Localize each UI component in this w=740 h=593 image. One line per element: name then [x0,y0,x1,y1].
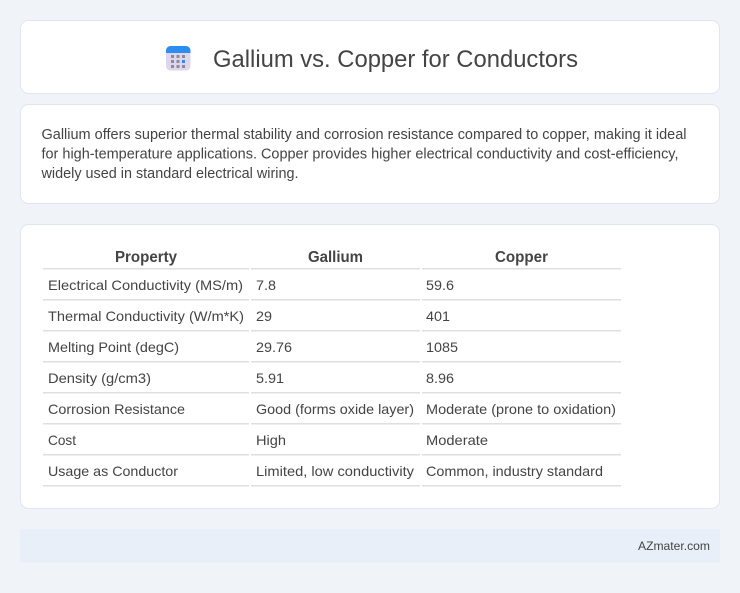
row: usage as conductor: Limited, low conductivity [256,463,414,479]
panel: comparison table [20,224,720,508]
row: electrical conductivity: 7.8 [256,277,276,293]
table header [115,249,548,266]
row: thermal conductivity [48,308,450,324]
table header: Property [115,249,177,266]
row: cost: Moderate [426,432,488,448]
row: thermal conductivity: 401 [426,308,450,324]
row: corrosion resistance [48,401,616,417]
row: usage as conductor: Common, industry standard [426,463,603,479]
row: usage as conductor: Usage as Conductor [48,463,178,479]
title: Gallium vs. Copper for Conductors [213,46,578,73]
row: melting point [48,339,458,355]
row: melting point: Melting Point (degC) [48,339,179,355]
row: corrosion resistance: Corrosion Resistance [48,401,185,417]
summary text [41,127,686,182]
row: usage as conductor [48,463,603,479]
summary text: for high-temperature applications. Copper provides higher electrical conductivity and cost-efficiency, [42,146,678,162]
table header: Copper [495,249,548,266]
row: corrosion resistance: Good (forms oxide layer) [256,401,414,417]
row: cost: High [256,432,286,448]
row: density: 8.96 [426,370,454,386]
row: electrical conductivity: Electrical Conductivity (MS/m) [48,277,243,293]
row: thermal conductivity: 29 [256,308,272,324]
footer bar [20,529,720,562]
row: melting point: 29.76 [256,339,292,355]
row: density: 5.91 [256,370,284,386]
row: density [48,370,454,386]
row: melting point: 1085 [426,339,458,355]
panel: title header [20,20,720,94]
row: cost: Cost [48,432,76,448]
row: electrical conductivity [48,277,454,293]
panel: summary [20,104,720,204]
footer credit: AZmater.com [638,539,710,553]
table header: Gallium [308,249,363,266]
row: thermal conductivity: Thermal Conductivity (W/m*K) [48,308,244,324]
row: cost [48,432,488,448]
summary text: Gallium offers superior thermal stability and corrosion resistance compared to copper, making it ideal [42,127,686,143]
row: density: Density (g/cm3) [48,370,151,386]
row: electrical conductivity: 59.6 [426,277,454,293]
icon: calendar grid [166,46,190,70]
summary text: widely used in standard electrical wiring. [41,166,298,182]
row: corrosion resistance: Moderate (prone to oxidation) [426,401,616,417]
